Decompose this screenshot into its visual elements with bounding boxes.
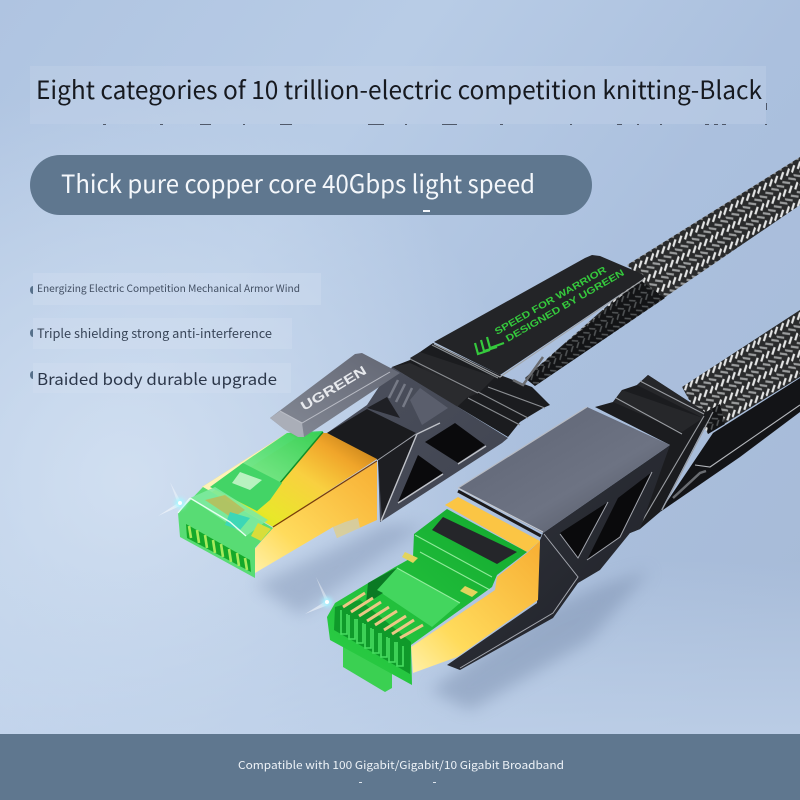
green transparent front (178, 487, 273, 578)
title residue marks (103, 103, 767, 125)
feature list (30, 273, 321, 393)
flat black strip (660, 378, 800, 512)
feature 1: Energizing Electric Competition Mechanical Armor Wind (37, 280, 300, 295)
feature 2 (30, 318, 292, 349)
green tab (343, 645, 392, 692)
shadow (430, 570, 650, 710)
subtitle pill (30, 155, 592, 215)
feature 3: Braided body durable upgrade (37, 366, 277, 390)
sparkle (158, 482, 185, 516)
bottom band (0, 734, 800, 800)
housing (327, 367, 508, 522)
lower connector (305, 407, 670, 710)
feature 2: Triple shielding strong anti-interference (37, 323, 272, 342)
gold shell side (255, 462, 377, 573)
braided sleeve, lower (682, 310, 800, 434)
collar, lower (595, 375, 713, 533)
green print: SPEED FOR WARRIOR (493, 264, 609, 338)
upper cable (392, 157, 800, 437)
title panel (30, 66, 766, 124)
strain relief tag with green print (434, 255, 645, 377)
green print: DESIGNED BY UGREEN (504, 267, 627, 345)
title text: Eight categories of 10 trillion-electric competition knitting-Black (36, 71, 762, 107)
soft shadow (255, 525, 425, 615)
braided sleeve, upper (525, 157, 800, 386)
feature 3 (30, 363, 291, 393)
gold shell (411, 497, 540, 673)
lower cable (595, 310, 800, 533)
clip with UGREEN logo: UGREEN (298, 363, 369, 414)
subtitle text: Thick pure copper core 40Gbps light speed (61, 165, 535, 201)
gold shell top (202, 433, 377, 527)
green clip (210, 431, 323, 511)
green print (475, 264, 627, 354)
housing (447, 445, 670, 670)
sparkle (305, 577, 332, 614)
feature 1 (30, 273, 321, 305)
clip with UGREEN logo (270, 353, 400, 437)
contacts (334, 593, 423, 674)
compatibility text: Compatible with 100 Gigabit/Gigabit/10 Gigabit Broadband (238, 757, 564, 773)
upper connector (158, 353, 508, 615)
green housing (327, 509, 527, 685)
gray top plate (458, 407, 670, 533)
collar, upper (392, 343, 550, 437)
